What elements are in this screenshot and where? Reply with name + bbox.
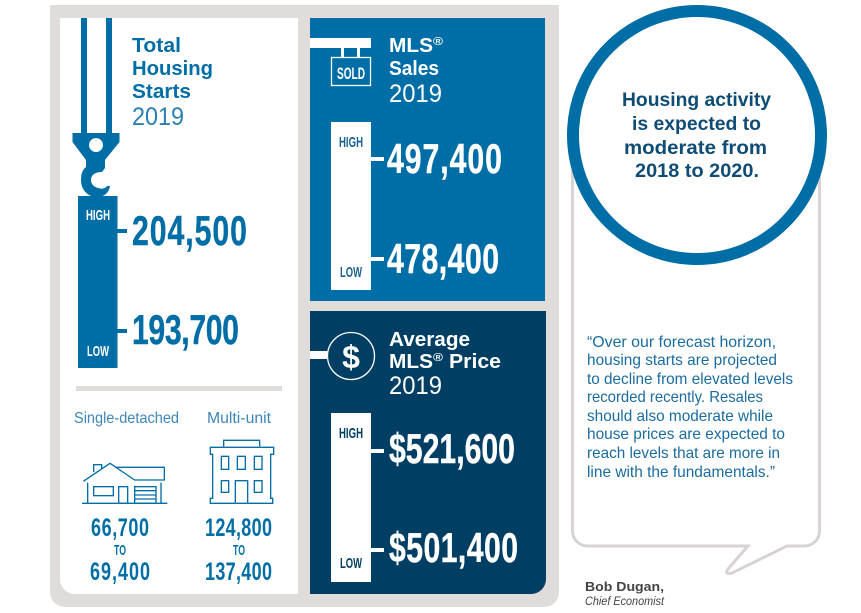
panel: MLS sales: [310, 18, 545, 301]
range bar: MLS sales: [331, 122, 384, 290]
range bar: housing starts: [78, 196, 127, 368]
quote text: “Over our forecast horizon,: [587, 334, 776, 351]
value: high $521,600: $521,600: [389, 425, 515, 472]
heading: total housing starts: Total: [132, 34, 181, 57]
value: high 497,400: 497,400: [387, 135, 502, 182]
divider: [76, 386, 282, 391]
icon: dollar coin: $: [342, 339, 360, 375]
values: single-detached range: 69,400: [90, 557, 150, 586]
heading: average MLS price: 2019: [389, 372, 442, 400]
quote text: housing starts are projected: [587, 352, 777, 369]
callout circle: housing activity: [573, 11, 821, 259]
heading: MLS sales: [389, 34, 443, 108]
values: multi-unit range: TO: [233, 542, 245, 559]
heading: MLS sales: 2019: [389, 80, 442, 108]
quote text: reach levels that are more in: [587, 445, 780, 462]
panel: average MLS price: [310, 311, 546, 594]
heading: average MLS price: [389, 328, 501, 400]
label: multi-unit: Multi-unit: [207, 410, 272, 427]
heading: average MLS price: Price: [449, 350, 501, 373]
range bar: housing starts: LOW: [87, 343, 110, 360]
values: multi-unit range: 124,800: [205, 513, 272, 542]
values: single-detached range: 66,700: [91, 513, 149, 542]
heading: average MLS price: MLS: [389, 350, 433, 373]
range bar: average price: [331, 413, 384, 582]
callout text: [622, 90, 771, 182]
attribution: Bob Dugan: [585, 579, 665, 608]
values: single-detached range: [90, 513, 150, 586]
callout text: moderate from: [624, 138, 767, 159]
value: low 478,400: 478,400: [387, 235, 499, 282]
icon: dollar coin: [310, 332, 374, 380]
quote text: should also moderate while: [587, 408, 773, 425]
panel: total housing starts: [60, 18, 298, 594]
value: low 193,700: 193,700: [132, 306, 239, 353]
quote text: to decline from elevated levels: [587, 371, 793, 388]
quote text: house prices are expected to: [587, 426, 785, 443]
icon: sold sign: SOLD: [337, 64, 365, 83]
callout text: is expected to: [632, 114, 761, 135]
label: single-detached: Single-detached: [74, 410, 179, 427]
callout text: 2018 to 2020.: [635, 161, 759, 182]
callout text: Housing activity: [622, 90, 771, 111]
range bar: housing starts: HIGH: [86, 207, 110, 224]
heading: MLS sales: MLS: [389, 34, 433, 57]
heading: total housing starts: Housing: [132, 57, 213, 80]
heading: average MLS price: ®: [433, 352, 443, 364]
range bar: MLS sales: LOW: [340, 264, 363, 281]
icon: crane hook: [72, 18, 120, 197]
range bar: average price: HIGH: [339, 425, 363, 442]
quote text: [587, 334, 793, 481]
icon: house: [82, 463, 167, 503]
range bar: MLS sales: HIGH: [339, 134, 363, 151]
heading: total housing starts: [132, 34, 213, 131]
range bar: average price: LOW: [340, 555, 363, 572]
quote text: line with the fundamentals.”: [587, 464, 775, 481]
icon: sold sign: [310, 38, 371, 86]
value: low $501,400: $501,400: [389, 524, 518, 571]
value: high 204,500: 204,500: [132, 207, 247, 254]
attribution: Bob Dugan: Chief Economist: [585, 594, 665, 608]
speech bubble: economist quote: [572, 170, 820, 574]
heading: MLS sales: ®: [433, 36, 443, 48]
icon: apartment building: [210, 440, 274, 503]
quote text: recorded recently. Resales: [587, 389, 763, 406]
grey backing panel: [50, 5, 559, 607]
heading: total housing starts: 2019: [132, 103, 184, 131]
values: multi-unit range: 137,400: [205, 557, 272, 586]
heading: MLS sales: Sales: [389, 57, 439, 80]
heading: total housing starts: Starts: [132, 80, 191, 103]
heading: average MLS price: Average: [389, 328, 470, 351]
values: single-detached range: TO: [114, 542, 126, 559]
values: multi-unit range: [205, 513, 272, 586]
attribution: Bob Dugan: Bob Dugan,: [585, 579, 664, 594]
